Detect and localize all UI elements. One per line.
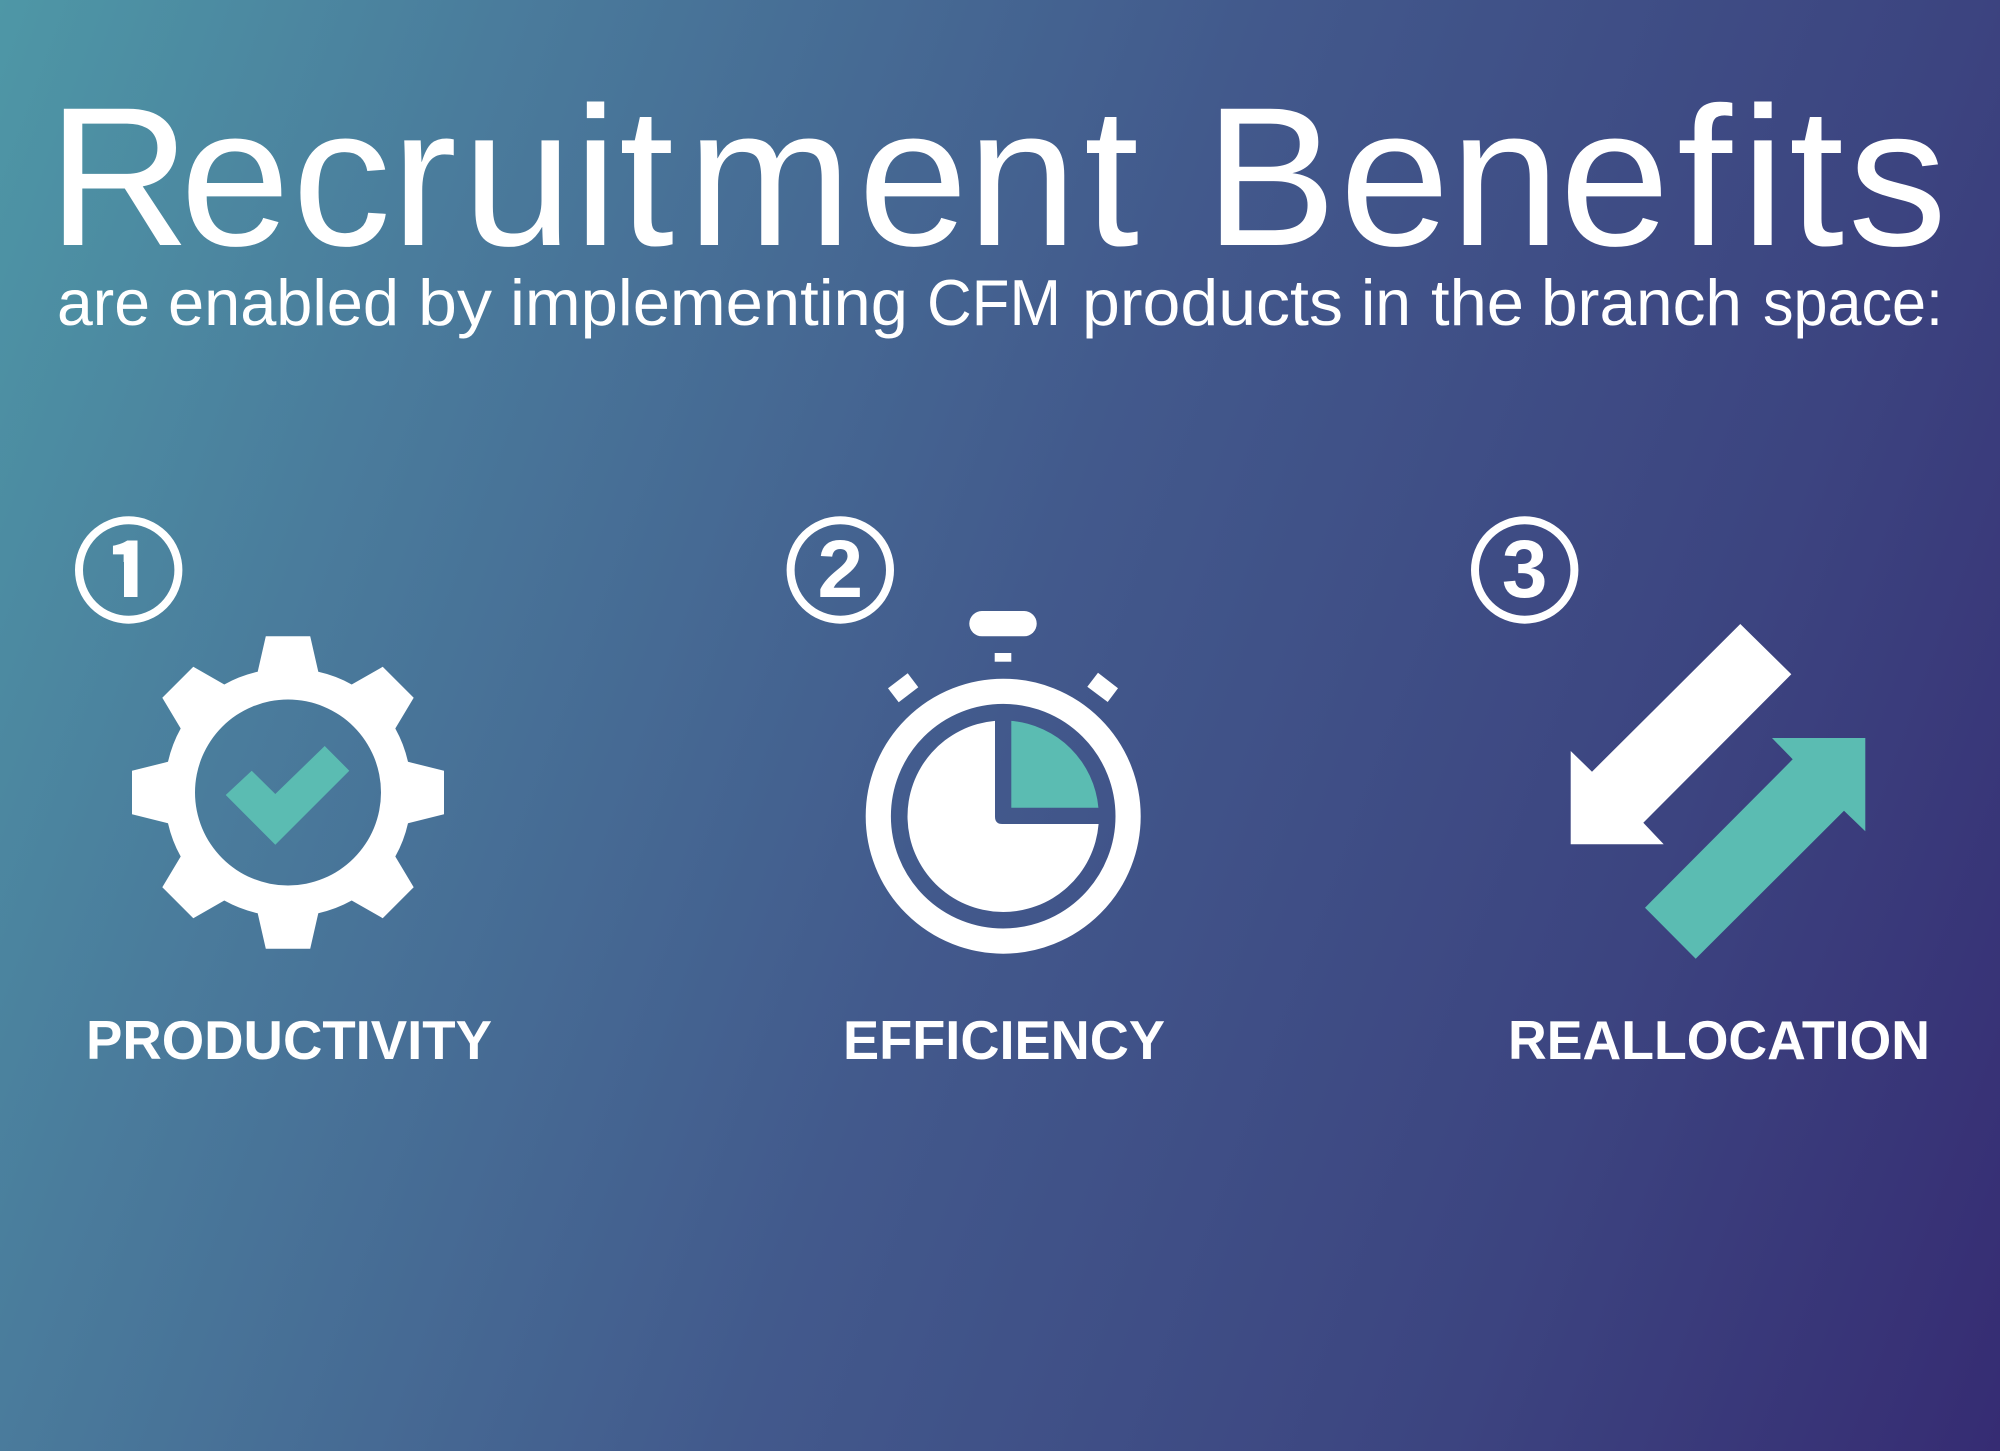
icon: gear with check mark: [132, 636, 444, 949]
title: Benefits: [1205, 66, 1947, 287]
subtitle: the: [1431, 266, 1524, 339]
subtitle: CFM: [927, 266, 1061, 339]
subtitle: by: [418, 266, 493, 339]
label: reallocation: REALLOCATION: [1508, 1009, 1930, 1071]
number badge 2: [791, 520, 890, 620]
subtitle: in: [1361, 266, 1411, 339]
icon: stopwatch: [878, 611, 1128, 941]
number badge 3: [1475, 520, 1574, 620]
subtitle: [57, 266, 1943, 339]
number badge 1: 1: [105, 508, 153, 620]
number badge 1: [79, 508, 178, 620]
icon: reallocation arrows: [1571, 624, 1865, 959]
number badge 2: 2: [817, 524, 863, 615]
label: productivity: PRODUCTIVITY: [86, 1009, 492, 1071]
title: Recruitment: [48, 66, 1139, 287]
subtitle: are: [57, 266, 150, 339]
subtitle: products: [1082, 266, 1343, 339]
number badge 3: 3: [1502, 524, 1548, 615]
subtitle: space:: [1763, 266, 1943, 339]
subtitle: enabled: [168, 266, 399, 339]
title: [48, 66, 1947, 287]
label: efficiency: EFFICIENCY: [843, 1009, 1165, 1071]
subtitle: branch: [1541, 266, 1742, 339]
subtitle: implementing: [510, 266, 908, 339]
